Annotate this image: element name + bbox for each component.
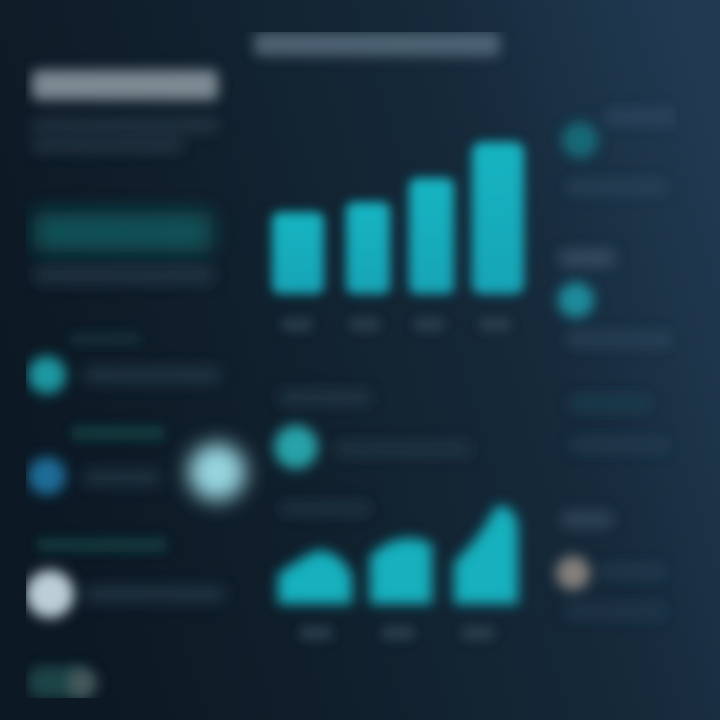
bar chart: bottom <box>278 506 518 640</box>
list text one <box>84 367 220 383</box>
metric caption <box>280 502 370 515</box>
teal highlight caption <box>34 266 214 284</box>
metric heading <box>280 390 370 405</box>
left description <box>32 120 218 151</box>
icon: right teal dot middle <box>558 282 594 318</box>
right heading three <box>562 512 612 527</box>
rounded bar 3 <box>454 506 518 604</box>
icon: blue dot <box>28 457 66 495</box>
bar 3 <box>409 178 454 294</box>
icon: teal dot <box>28 356 66 394</box>
icon: tan dot <box>556 556 590 590</box>
page title <box>254 32 500 56</box>
footer badge <box>28 666 88 698</box>
icon: teal metric dot <box>274 425 318 469</box>
bar 4 <box>472 142 524 294</box>
list text two <box>84 470 160 485</box>
list heading two <box>72 426 164 440</box>
panel: middle metric <box>274 390 470 515</box>
list text three <box>86 586 224 602</box>
icon: right teal dot top <box>562 122 598 158</box>
bar chart axis labels <box>282 318 510 331</box>
bottom chart axis labels <box>300 626 494 640</box>
right text five <box>600 564 666 578</box>
rounded bar 2 <box>370 538 432 604</box>
panel: left column <box>26 70 246 698</box>
rounded bar 1 <box>278 550 352 604</box>
right heading two <box>570 396 650 410</box>
list heading one <box>70 333 140 345</box>
icon: large pale circle <box>188 443 246 501</box>
icon: white dot <box>26 570 74 618</box>
right text two <box>566 180 666 194</box>
right heading <box>560 250 614 266</box>
teal highlight text <box>34 212 212 252</box>
metric text <box>336 442 470 456</box>
panel: right column <box>556 110 676 618</box>
bar chart: top <box>272 142 524 331</box>
right text three <box>566 332 672 346</box>
list heading three <box>38 538 166 552</box>
right text four <box>570 438 670 452</box>
right text one <box>606 110 676 124</box>
bar 1 <box>272 212 324 294</box>
right text six <box>566 604 666 618</box>
bar 2 <box>346 202 390 294</box>
left heading <box>32 70 218 100</box>
